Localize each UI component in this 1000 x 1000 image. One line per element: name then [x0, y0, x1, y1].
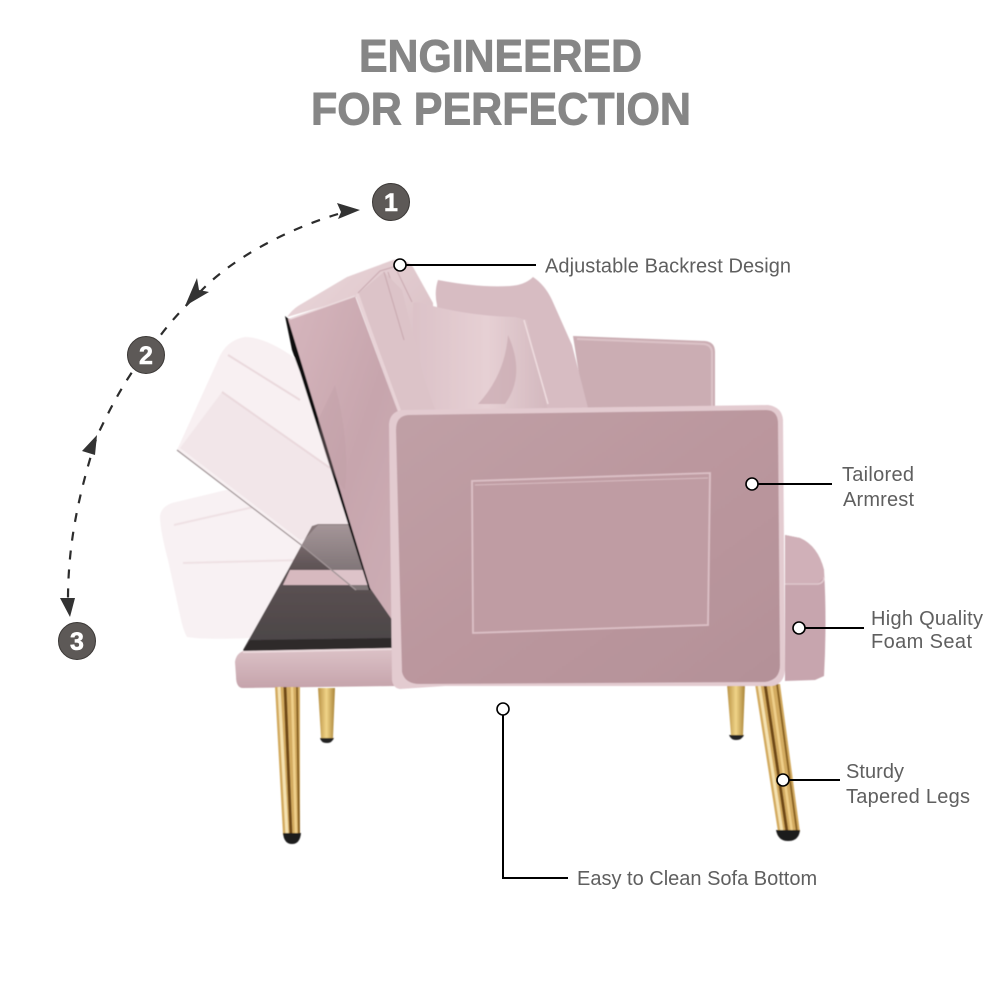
callout: high quality foam seat: High Quality — [871, 608, 983, 630]
front armrest — [389, 405, 785, 689]
near leg left — [275, 687, 301, 844]
near leg right — [755, 684, 800, 841]
far legs — [318, 684, 745, 743]
step 2 badge: 2 — [139, 342, 153, 370]
callout: sturdy tapered legs: Tapered Legs — [846, 786, 970, 808]
title — [311, 30, 691, 134]
right seat end — [785, 535, 826, 681]
callout: easy to clean sofa bottom: Easy to Clean Sofa Bottom — [577, 868, 817, 890]
back armrest — [573, 336, 715, 412]
step 3 badge — [58, 622, 96, 660]
callout: sturdy tapered legs — [777, 761, 970, 808]
back pillow — [436, 277, 589, 412]
callout: adjustable backrest design: Adjustable Backrest Design — [545, 256, 791, 278]
backrest side panel — [288, 294, 400, 624]
title: ENGINEERED — [359, 30, 642, 82]
callout: adjustable backrest design — [394, 256, 791, 278]
front seat edge — [235, 648, 397, 688]
ghost reclined seat position — [160, 482, 352, 640]
reclining motion arc with steps — [58, 184, 410, 660]
callout: easy to clean sofa bottom — [497, 703, 817, 890]
front pillow — [413, 302, 548, 412]
callout: high quality foam seat: Foam Seat — [871, 631, 972, 653]
step 3 badge: 3 — [70, 628, 84, 656]
armrest pocket — [472, 473, 710, 633]
backrest black edge — [285, 316, 371, 590]
callout: tailored armrest: Tailored — [842, 464, 914, 486]
sofa illustration — [160, 260, 826, 844]
ghost backrest shadow overlay on seat — [177, 450, 372, 590]
step 1 badge — [372, 184, 410, 220]
title: FOR PERFECTION — [311, 84, 691, 134]
dashed arc and arrowheads — [60, 203, 360, 617]
callout: tailored armrest — [746, 464, 914, 511]
step 2 badge — [128, 336, 164, 374]
ghost mid backrest position — [177, 337, 350, 544]
seat platform with dark frame — [243, 524, 394, 651]
callout: high quality foam seat — [793, 608, 983, 653]
step 1 badge: 1 — [384, 189, 398, 217]
callout: tailored armrest: Armrest — [843, 489, 914, 511]
backrest top cushion — [287, 260, 436, 412]
callout: sturdy tapered legs: Sturdy — [846, 761, 904, 783]
